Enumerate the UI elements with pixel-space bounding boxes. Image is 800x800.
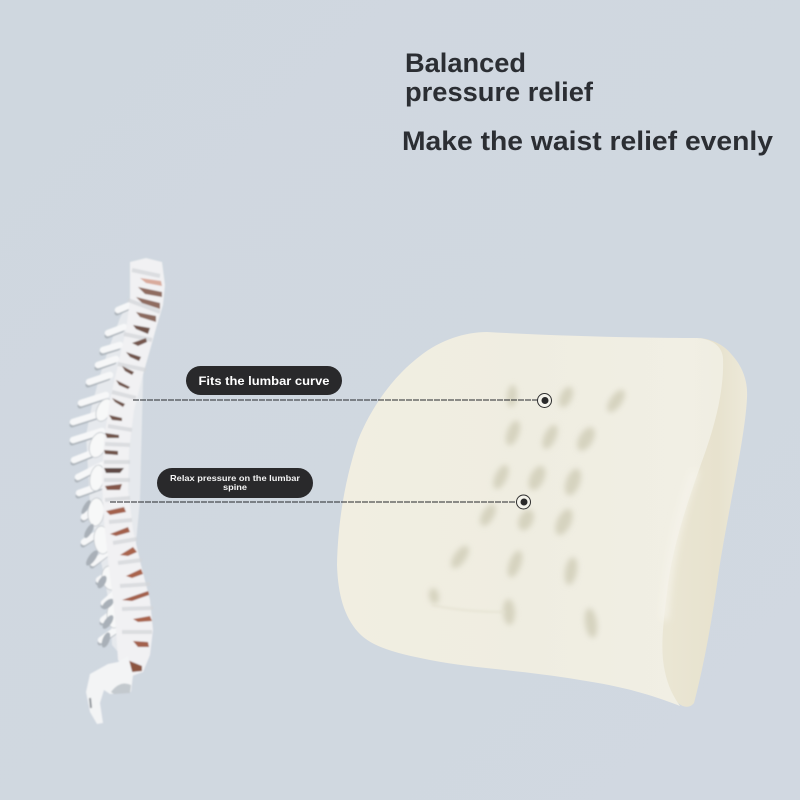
articular facets	[86, 396, 121, 628]
discs	[104, 278, 162, 672]
callout marker: bottom	[516, 495, 530, 509]
cushion side	[650, 338, 747, 707]
moulded crease	[432, 605, 505, 612]
cushion front	[337, 332, 723, 706]
illustration: spine	[72, 258, 165, 724]
subtitle: Make the waist relief evenly	[402, 126, 773, 156]
label pill: fits the lumbar curve	[186, 366, 342, 395]
label pill: relax pressure on the lumbar spine	[157, 468, 313, 498]
vertebral column	[102, 258, 165, 676]
processes shadow	[72, 308, 128, 643]
title: balanced pressure relief: pressure relief	[405, 77, 593, 107]
label pill: relax pressure on the lumbar spine: Relax pressure on the lumbar	[170, 473, 301, 483]
label pill: relax pressure on the lumbar spine: spine	[223, 482, 247, 492]
title: balanced pressure relief	[405, 48, 593, 107]
callout marker: top	[538, 394, 552, 408]
fused white mass behind the processes	[86, 296, 145, 660]
dimples	[428, 384, 628, 639]
vertebra shading bands	[104, 270, 160, 632]
leader line: relax pressure	[110, 501, 517, 503]
title: balanced pressure relief: Balanced	[405, 48, 526, 78]
processes	[73, 305, 130, 640]
leader line: lumbar curve	[133, 399, 538, 401]
sacrum	[86, 656, 133, 724]
soft highlight on the curved edge	[664, 470, 695, 620]
illustration: lumbar cushion	[337, 332, 747, 707]
label pill: fits the lumbar curve: Fits the lumbar curve	[198, 376, 330, 388]
grey facets	[80, 499, 116, 649]
